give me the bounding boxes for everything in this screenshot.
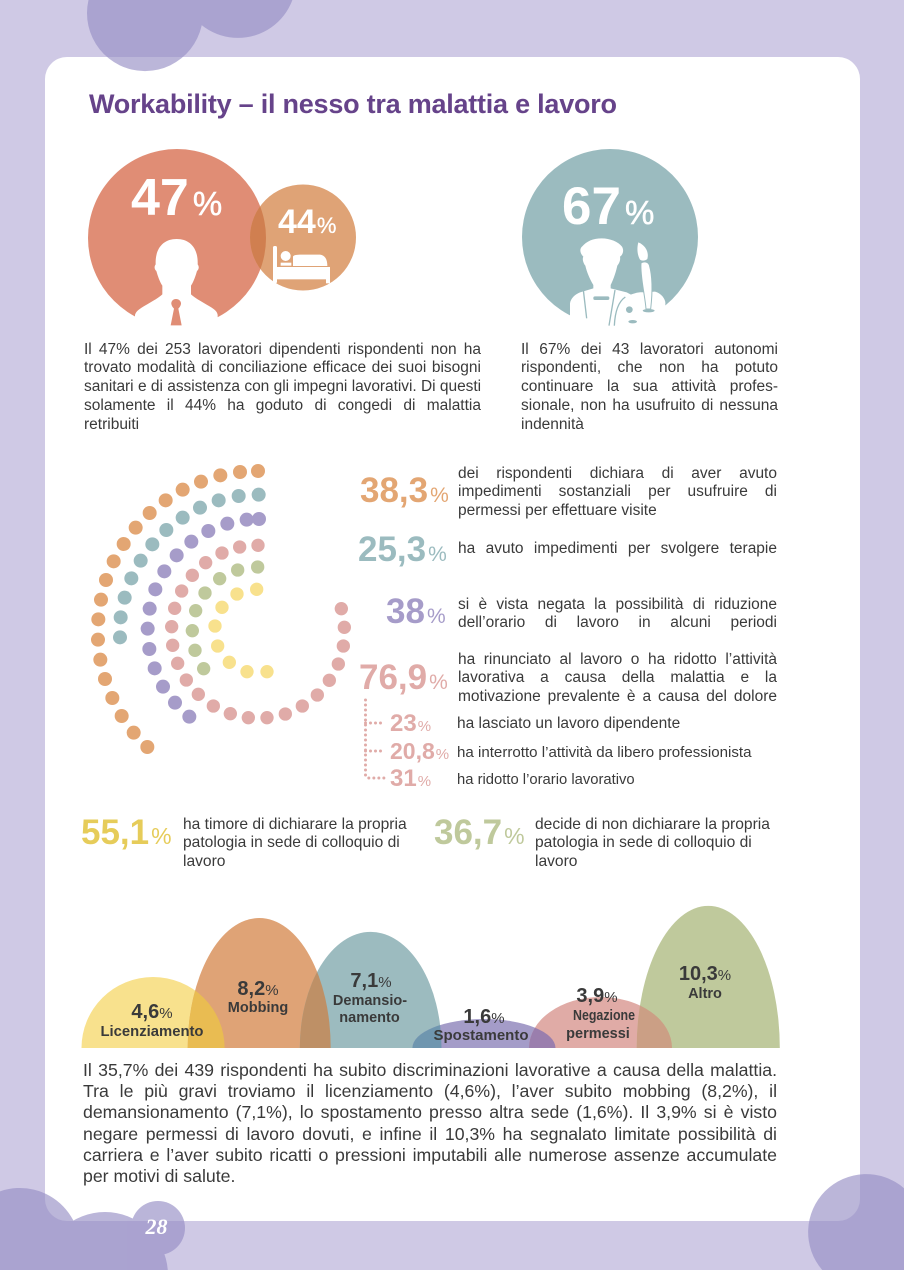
stat: 38,3%: [360, 464, 777, 519]
text: discrimination paragraph: [83, 1060, 777, 1186]
label: Spostamento: Spostamento: [434, 1028, 529, 1044]
label: Licenziamento: Licenziamento: [100, 1024, 204, 1040]
description: decide di non dichiarare la propria: [535, 816, 770, 832]
label: Negazione permessi: permessi: [566, 1026, 630, 1042]
label: Negazione permessi: Negazione: [573, 1008, 635, 1024]
description: ha avuto impedimenti per svolgere terapie: [458, 540, 777, 556]
label: Altro: Altro: [688, 986, 722, 1002]
text: discrimination paragraph: Tra le più gravi troviamo il licenziamento (4,6%), l’aver subito mobbing (8,2%), il: [83, 1081, 777, 1101]
title: Workability – il nesso tra malattia e lavoro: [89, 89, 617, 119]
hill: altro: [637, 906, 780, 1048]
hill: mobbing: [188, 918, 331, 1048]
icon: employee with tie: [135, 239, 218, 330]
value: 44%: 44%: [278, 203, 336, 241]
text: discrimination paragraph: carriera e l’aver subito ricatti o pressioni imputabili alle numerose assenze accumulate: [83, 1145, 777, 1165]
sub-stat: 31%: [390, 765, 635, 792]
dots: yellow arc: [208, 583, 274, 678]
hill: negazione permessi: [529, 997, 672, 1048]
hill overlap: spostamento and negazione: [529, 1028, 556, 1048]
number: 23%: [390, 710, 431, 737]
text: discrimination paragraph: Il 35,7% dei 439 rispondenti ha subito discriminazioni lavorative a causa della malattia.: [83, 1060, 777, 1080]
number: 31%: [390, 765, 431, 792]
dots: pink arc: [165, 539, 351, 724]
label: Demansionamento: Demansio-: [333, 993, 407, 1009]
description: permessi per effettuare visite: [458, 502, 657, 519]
hill labels: [100, 963, 731, 1044]
number: 25,3%: [358, 530, 447, 569]
number: 20,8%: [390, 738, 449, 764]
description: lavoro: [183, 853, 225, 870]
value: 67%: 67%: [562, 177, 654, 236]
description: ha timore di dichiarare la propria: [183, 816, 407, 832]
hill: demansionamento: [300, 932, 442, 1048]
description: dei rispondenti dichiara di aver avuto: [458, 464, 777, 482]
number: 38,3%: [360, 471, 449, 510]
description: ha rinunciato al lavoro o ha ridotto l’attività: [458, 650, 777, 668]
label: 8,2%: 8,2%: [237, 978, 279, 1000]
stat: 55,1%: [81, 813, 407, 870]
number: 36,7%: [434, 813, 525, 852]
stat: 25,3%: [358, 530, 777, 569]
description: [535, 816, 770, 870]
description: [458, 650, 777, 705]
text: self-employed paragraph: indennità: [521, 416, 584, 433]
description: patologia in sede di colloquio di: [535, 834, 752, 851]
hill: spostamento: [412, 1019, 556, 1048]
circle chart: 67% self-employed: [522, 149, 698, 332]
description: ha lasciato un lavoro dipendente: [457, 714, 680, 732]
dots: teal arc: [113, 488, 266, 644]
number: 55,1%: [81, 813, 172, 852]
text: employees paragraph: [84, 340, 481, 433]
label: 7,1%: 7,1%: [350, 970, 392, 992]
stat: 36,7%: [434, 813, 770, 870]
text: discrimination paragraph: negare permessi di lavoro dovuti, e infine il 10,3% ha segnalato limitate possibilità di: [83, 1124, 777, 1144]
page number: 28: [144, 1214, 168, 1239]
description: patologia in sede di colloquio di: [183, 834, 400, 851]
label: Mobbing: Mobbing: [228, 1000, 288, 1016]
text: employees paragraph: Il 47% dei 253 lavoratori dipendenti rispondenti non ha: [84, 340, 481, 358]
hill: licenziamento: [82, 977, 225, 1048]
text: discrimination paragraph: per motivi di salute.: [83, 1166, 235, 1186]
hill overlap: licenziamento and mobbing: [188, 990, 224, 1048]
description: si è vista negata la possibilità di riduzione: [458, 596, 777, 612]
description: motivazione prevalente è a causa del dolore: [458, 688, 777, 705]
description: [458, 464, 777, 519]
text: self-employed paragraph: [521, 340, 778, 433]
icon: artist with palette: [570, 238, 665, 332]
stat: 76,9%: [359, 650, 777, 705]
text: employees paragraph: retribuiti: [84, 416, 139, 433]
description: dell’orario di lavoro in alcuni periodi: [458, 614, 777, 631]
label: 10,3%: 10,3%: [679, 963, 731, 985]
dotted connector tree: [366, 700, 384, 778]
circle chart: 44% paid sick leave: [250, 184, 356, 290]
hill overlap: negazione and altro: [636, 1006, 672, 1048]
text: employees paragraph: sanitari e di assistenza con gli impegni lavorativi. Di questi: [84, 378, 481, 395]
sub-stat: 20,8%: [390, 738, 752, 764]
hill overlap: mobbing and demansionamento: [300, 972, 331, 1048]
hill overlap: demansionamento and spostamento: [412, 1025, 442, 1048]
text: discrimination paragraph: demansionamento (7,1%), lo spostamento presso altra sede (1,6%). Il 3,9% si è visto: [83, 1102, 777, 1122]
dots: green arc: [186, 560, 264, 675]
number: 76,9%: [359, 658, 448, 697]
label: 4,6%: 4,6%: [131, 1001, 173, 1023]
value: 47%: 47%: [131, 169, 222, 227]
text: self-employed paragraph: sionale, non ha usufruito di nessuna: [521, 397, 778, 414]
description: ha ridotto l’orario lavorativo: [457, 772, 635, 788]
description: impedimenti sostanziali per usufruire di: [458, 483, 777, 500]
text: employees paragraph: trovato modalità di conciliazione efficace dei suoi bisogni: [84, 359, 481, 376]
label: Demansionamento: namento: [339, 1010, 400, 1026]
dots: purple arc: [141, 512, 266, 724]
icon: bed: [273, 246, 330, 283]
description: [458, 596, 777, 631]
text: self-employed paragraph: continuare la sua attività profes-: [521, 378, 778, 395]
description: lavoro: [535, 853, 577, 870]
description: [183, 816, 407, 870]
text: employees paragraph: solamente il 44% ha goduto di congedi di malattia: [84, 397, 481, 414]
label: 1,6%: 1,6%: [463, 1006, 505, 1028]
number: 38%: [386, 592, 446, 631]
circle chart: 47% employees: [88, 149, 266, 330]
stat: 38%: [386, 592, 777, 631]
text: self-employed paragraph: Il 67% dei 43 lavoratori autonomi: [521, 340, 778, 358]
description: lavorativa a causa della malattia e la: [458, 669, 777, 686]
text: self-employed paragraph: rispondenti, che non ha potuto: [521, 359, 778, 376]
hill chart: discrimination at work: [82, 906, 780, 1048]
sub-stat: 23%: [390, 710, 680, 737]
dots: orange arc: [91, 464, 265, 754]
label: 3,9%: 3,9%: [576, 985, 618, 1007]
spiral dot chart: [91, 464, 351, 754]
description: ha interrotto l’attività da libero professionista: [457, 744, 751, 760]
